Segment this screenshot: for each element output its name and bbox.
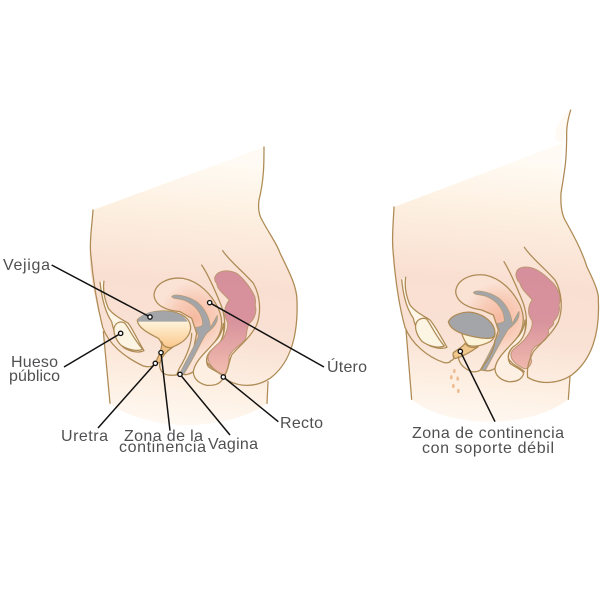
callout line: weak continence zone bbox=[458, 349, 495, 422]
callout line: Vejiga bbox=[52, 265, 152, 319]
figure: weak support anatomy bbox=[392, 110, 599, 422]
label: Vejiga: Vejiga bbox=[3, 257, 50, 274]
uterus bbox=[456, 262, 526, 382]
urethra with weak support bbox=[451, 340, 495, 372]
body silhouette bbox=[90, 147, 297, 425]
vagina canal bbox=[172, 295, 218, 374]
label: Zona de la continencia: continencia bbox=[119, 439, 206, 456]
label: Zona de la continencia bbox=[119, 428, 206, 456]
urine drops bbox=[450, 369, 460, 393]
label: Vagina: Vagina bbox=[208, 436, 258, 453]
label: Hueso público bbox=[9, 354, 60, 385]
label: Zona de continencia con soporte débil: con soporte débil bbox=[422, 440, 554, 457]
label: Hueso público: Hueso bbox=[11, 354, 58, 371]
body silhouette bbox=[392, 110, 599, 422]
callout line: Útero bbox=[207, 300, 324, 367]
bladder bbox=[448, 312, 495, 346]
label: Zona de la continencia: Zona de la bbox=[124, 428, 203, 445]
callout line: Hueso público bbox=[64, 331, 123, 367]
label: Útero: Útero bbox=[327, 357, 367, 376]
label: Uretra: Uretra bbox=[61, 428, 108, 445]
pubic bone bbox=[100, 281, 144, 352]
rectum bbox=[511, 247, 561, 377]
label: Zona de continencia con soporte débil bbox=[412, 425, 564, 457]
urethra and continence zone bbox=[155, 333, 192, 375]
labels bbox=[3, 257, 564, 457]
bladder bbox=[137, 311, 191, 348]
uterus bbox=[154, 265, 225, 385]
label: Zona de continencia con soporte débil: Zona de continencia bbox=[412, 425, 564, 442]
figure: healthy pelvic anatomy bbox=[52, 147, 324, 435]
callout line: Zona de la continencia bbox=[159, 350, 170, 431]
callout line: Recto bbox=[221, 375, 278, 422]
callout line: Uretra bbox=[98, 361, 157, 428]
vagina canal bbox=[473, 291, 519, 370]
label: Recto: Recto bbox=[280, 415, 323, 432]
rectum bbox=[208, 251, 260, 377]
pubic bone bbox=[402, 277, 447, 348]
callout line: Vagina bbox=[178, 372, 230, 435]
label: Hueso público: público bbox=[9, 368, 60, 385]
